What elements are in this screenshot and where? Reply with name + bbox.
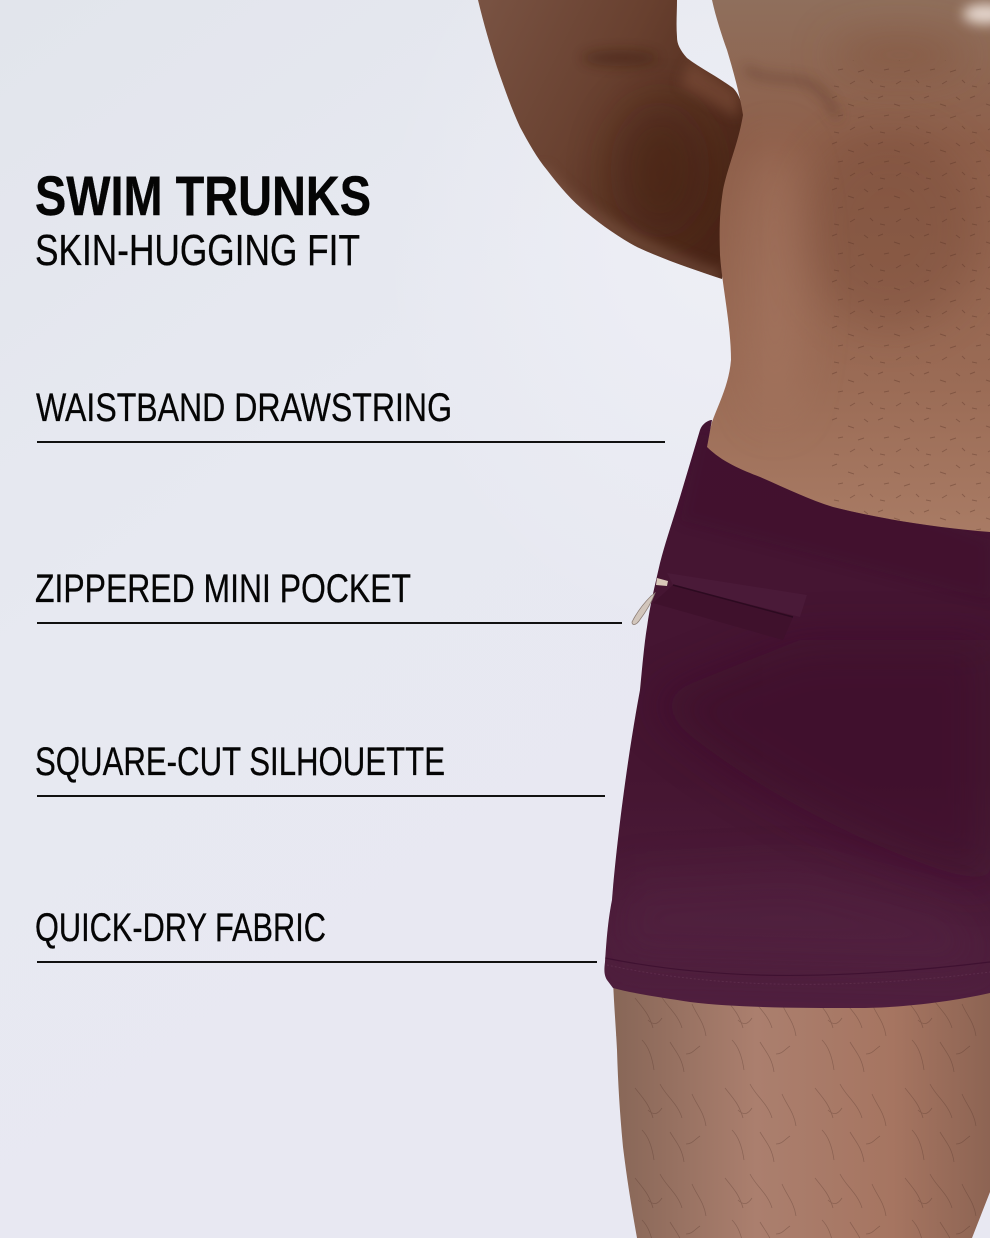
photo: model wearing swim trunks [470,0,990,1238]
feature: quick-dry fabric: QUICK-DRY FABRIC [35,906,326,950]
title: SWIM TRUNKS [35,164,371,227]
feature: square-cut silhouette: SQUARE-CUT SILHOUETTE [35,740,445,784]
torso [707,0,990,532]
subtitle: SKIN-HUGGING FIT [35,226,360,275]
feature: zippered mini pocket: ZIPPERED MINI POCKET [35,567,411,611]
arm [478,0,743,279]
feature: waistband drawstring: WAISTBAND DRAWSTRING [36,386,452,430]
zippered pocket [632,573,807,640]
leg [600,970,990,1238]
trunks [600,415,990,1015]
